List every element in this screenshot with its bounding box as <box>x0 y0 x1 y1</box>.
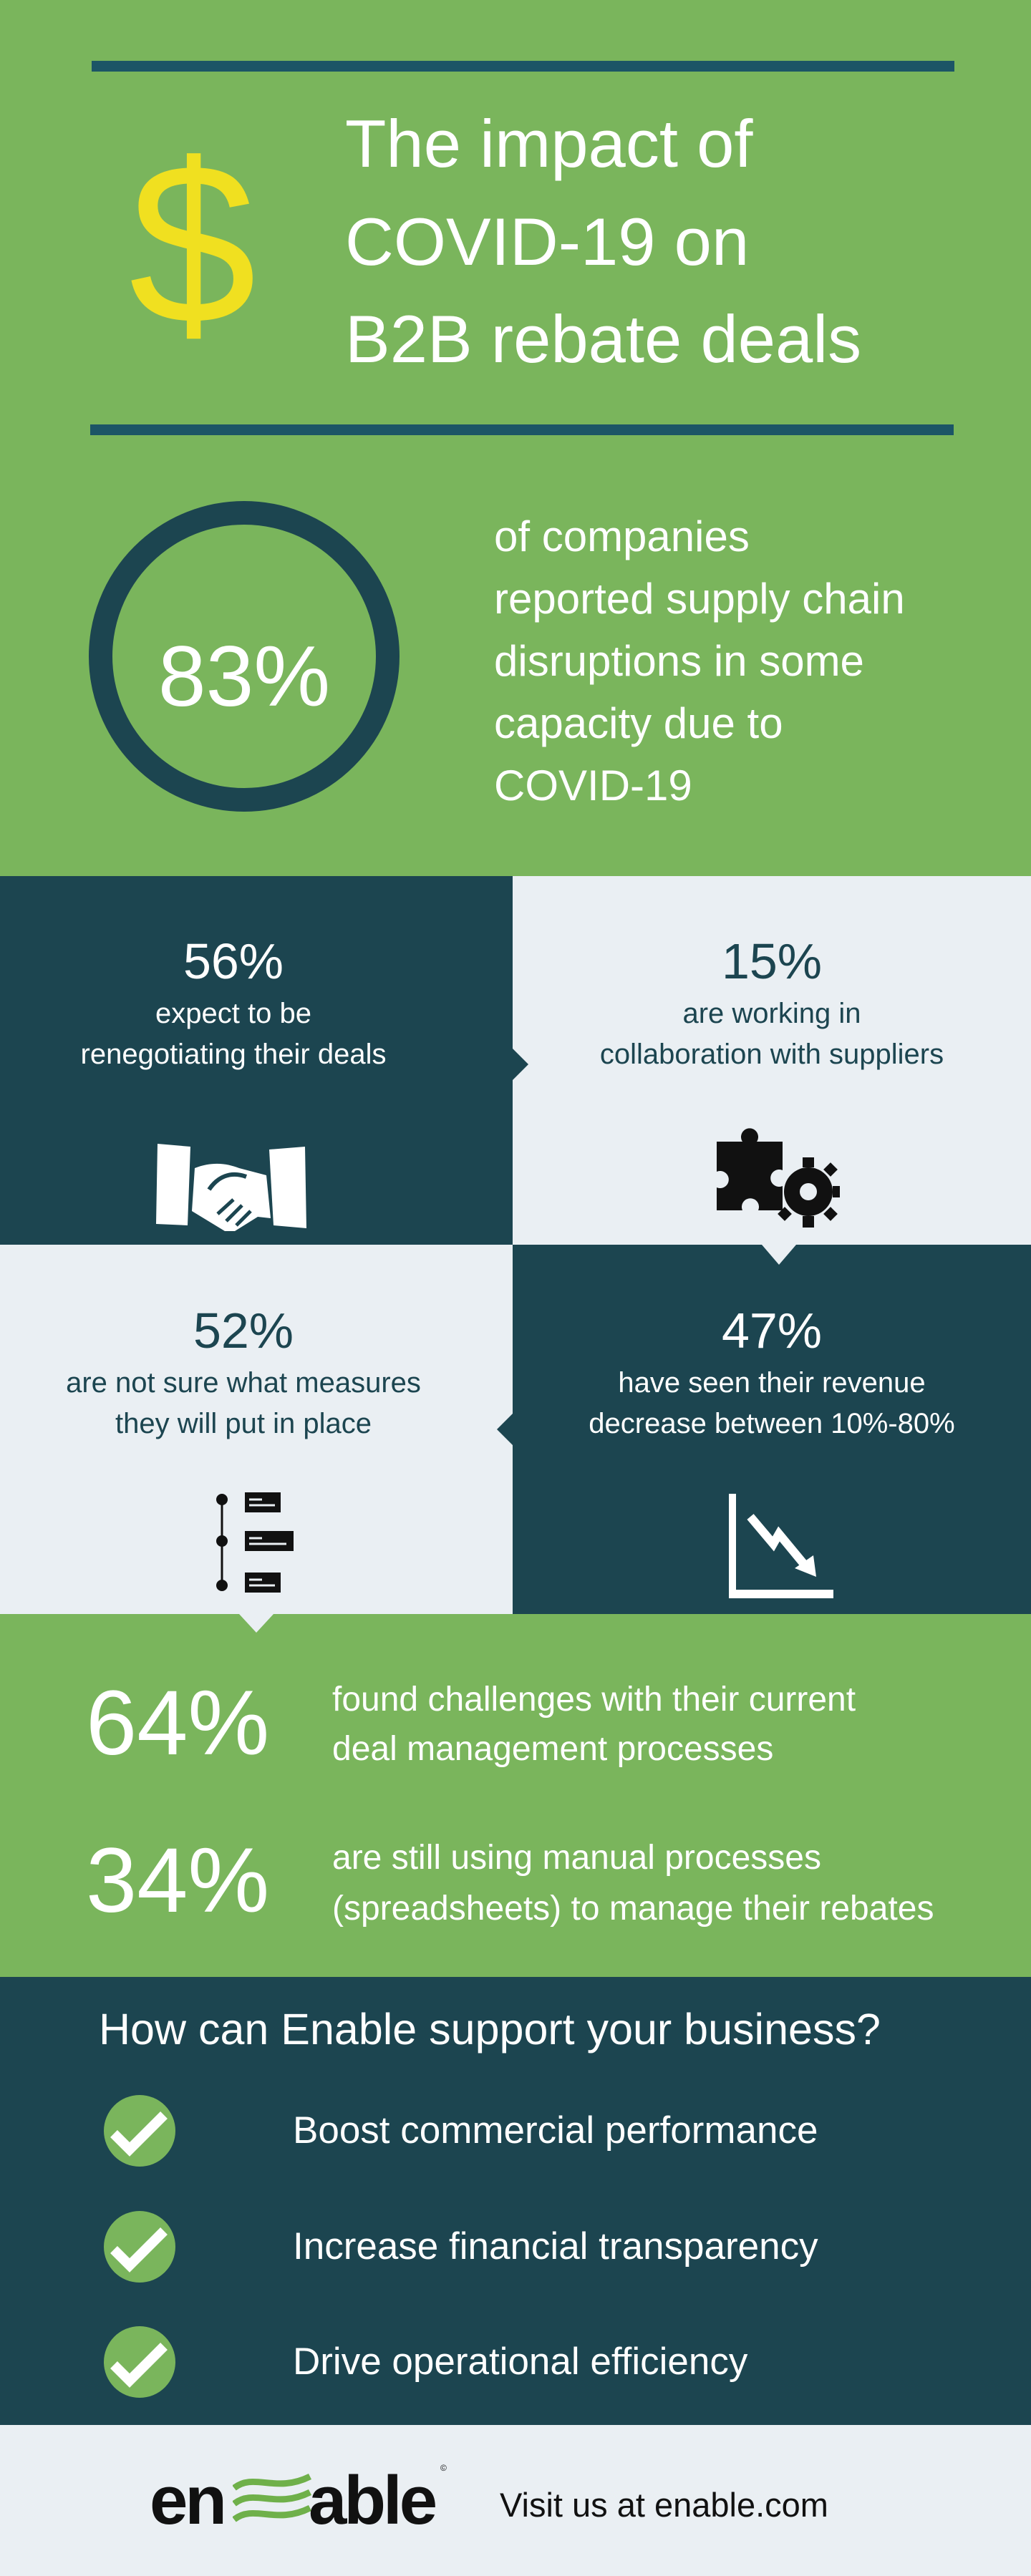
panel: 47% <box>513 1245 1031 1614</box>
icon: list timeline <box>216 1492 294 1593</box>
text 34%: (spreadsheets) to manage their rebates <box>332 1890 934 1928</box>
text: collaboration with suppliers <box>600 1039 944 1070</box>
icon: declining chart <box>729 1494 833 1598</box>
text: supply chain disruption: of companies <box>494 512 750 560</box>
panel: 52% <box>0 1245 513 1614</box>
arrow left <box>497 1414 513 1445</box>
title: COVID-19 on <box>345 204 749 279</box>
title: The impact of <box>345 106 752 181</box>
panel: 15% <box>513 876 1031 1245</box>
text: supply chain disruption: disruptions in some <box>494 637 864 685</box>
text: they will put in place <box>115 1408 372 1439</box>
text 64%: deal management processes <box>332 1730 773 1768</box>
icon: handshake <box>156 1144 306 1231</box>
logo: enable: © <box>440 2463 447 2473</box>
text: are working in <box>682 998 861 1029</box>
item: transparency <box>104 2211 818 2283</box>
icon: check <box>104 2326 175 2398</box>
item: efficiency <box>104 2326 747 2398</box>
logo: enable: able <box>309 2462 435 2539</box>
item: boost <box>104 2095 818 2167</box>
section: green stats <box>0 1614 1031 1977</box>
text <box>600 998 944 1070</box>
heading: How can Enable support your business? <box>99 2005 881 2053</box>
text: decrease between 10%-80% <box>589 1408 955 1439</box>
arrow right <box>513 1049 528 1080</box>
text: have seen their revenue <box>618 1367 926 1399</box>
top rule <box>92 61 954 72</box>
item: efficiency: Drive operational efficiency <box>293 2341 747 2383</box>
text <box>81 998 386 1070</box>
text 34%: are still using manual processes <box>332 1839 821 1877</box>
logo: enable: en <box>150 2462 224 2539</box>
icon: puzzle and gear <box>717 1128 840 1228</box>
text: expect to be <box>155 998 311 1029</box>
arrow down from 52% <box>239 1614 274 1633</box>
stat: 83% circle <box>89 501 400 812</box>
number 83%: 83% <box>158 628 330 724</box>
section: how Enable supports <box>0 1977 1031 2425</box>
icon: check <box>104 2211 175 2283</box>
stat 15%: 15% <box>722 933 822 989</box>
text 34% <box>332 1839 934 1928</box>
footer <box>0 2425 1031 2576</box>
section: header green <box>0 0 1031 876</box>
logo: enable <box>150 2462 447 2539</box>
stat 64%: 64% <box>86 1672 269 1774</box>
text: supply chain disruption <box>494 512 905 810</box>
text <box>589 1367 955 1439</box>
text 64%: found challenges with their current <box>332 1681 856 1719</box>
panel: 56% <box>0 876 513 1245</box>
arrow down from 15% <box>762 1245 796 1265</box>
text: are not sure what measures <box>66 1367 421 1399</box>
stat 52%: 52% <box>193 1303 294 1359</box>
item: boost: Boost commercial performance <box>293 2109 818 2152</box>
text <box>66 1367 421 1439</box>
title <box>345 106 861 376</box>
text 64% <box>332 1681 856 1768</box>
stat 34%: 34% <box>86 1829 269 1932</box>
stat 47%: 47% <box>722 1303 822 1359</box>
text: visit: Visit us at enable.com <box>500 2486 828 2524</box>
text: supply chain disruption: capacity due to <box>494 699 783 747</box>
text: supply chain disruption: reported supply chain <box>494 575 905 623</box>
text: supply chain disruption: COVID-19 <box>494 762 692 810</box>
title: B2B rebate deals <box>345 301 861 376</box>
text: renegotiating their deals <box>81 1039 386 1070</box>
item: transparency: Increase financial transparency <box>293 2225 818 2268</box>
icon: dollar sign: $ <box>129 115 256 371</box>
bottom rule <box>90 424 954 435</box>
stat 56%: 56% <box>183 933 284 989</box>
icon: check <box>104 2095 175 2167</box>
